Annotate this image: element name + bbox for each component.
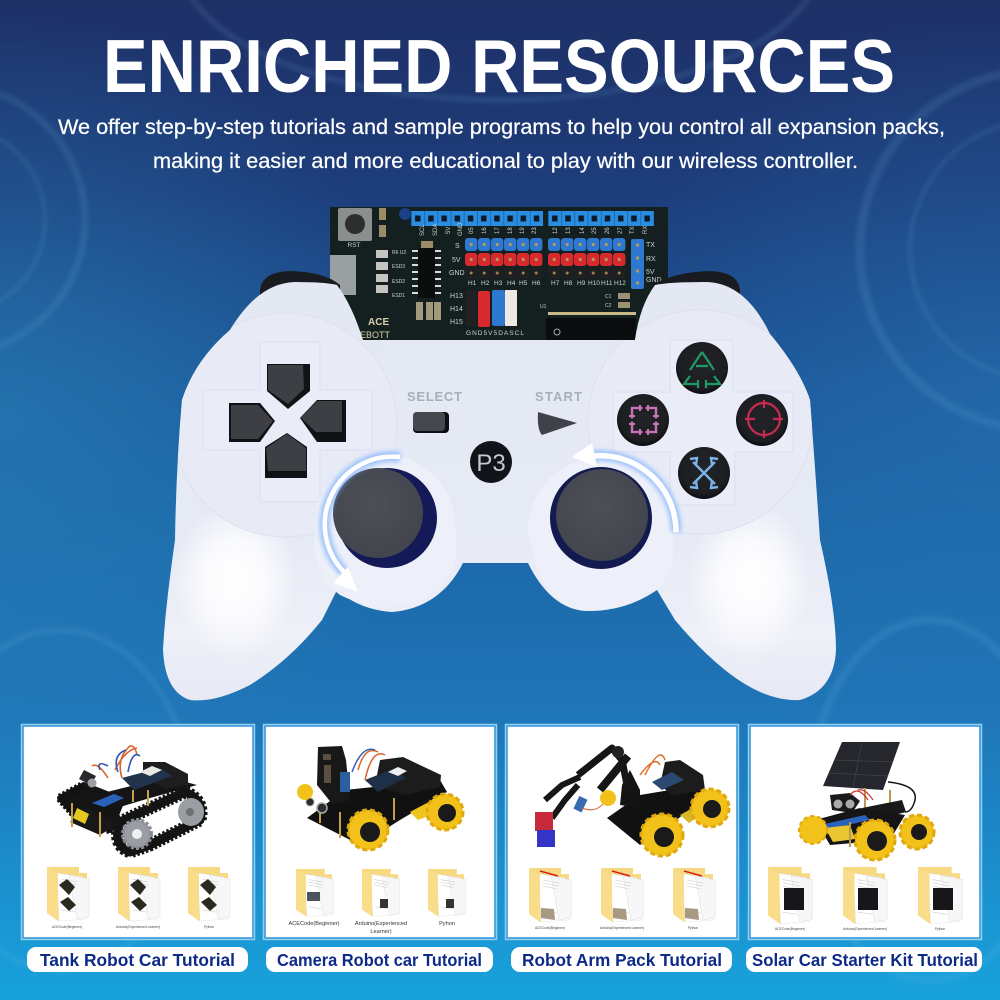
row labels: H5 [519, 280, 528, 287]
left joystick [314, 455, 457, 606]
triangle button [676, 342, 728, 394]
solar folder labels: ACECode(Beginner) [775, 927, 805, 931]
pin labels: 13 [566, 227, 572, 234]
row labels: H13 [450, 293, 463, 300]
pin labels: TX [630, 226, 636, 234]
chip and components: ESD2 [392, 279, 405, 285]
subtitle text [58, 115, 945, 173]
solar robot [799, 742, 934, 860]
select and start: START [535, 389, 582, 404]
pin labels: 05 [469, 227, 475, 234]
circle button [736, 394, 788, 446]
solar folder labels [775, 927, 945, 931]
tank folder labels: Arduino(Experienced Learner) [116, 925, 160, 929]
pin labels: 17 [495, 227, 501, 234]
arm folder labels: ACECode(Beginner) [535, 926, 565, 930]
row labels: H4 [507, 280, 516, 287]
grip highlights [189, 519, 796, 634]
shoulder buttons [260, 271, 740, 300]
top blue headers [411, 211, 654, 226]
H13-15 pin block: GND5V5DASCL [466, 330, 524, 337]
P3 button: P3 [476, 450, 506, 477]
left rotation arrow [325, 457, 400, 592]
row labels: H3 [494, 280, 503, 287]
row labels: GND [646, 277, 662, 284]
square button [617, 394, 669, 446]
camera folder labels: Learner) [370, 929, 392, 935]
row labels: TX [646, 242, 655, 249]
board logo: EBOTT [360, 330, 391, 340]
solar folders [768, 867, 962, 924]
label: camera robot car tutorial: Camera Robot car Tutorial [277, 950, 482, 970]
camera folder labels [288, 921, 455, 935]
camera folder labels: Pyhon [439, 921, 455, 927]
camera robot [297, 746, 463, 850]
pin labels: 14 [580, 227, 586, 234]
chip and components: C2 [605, 303, 612, 309]
panel: robot arm pack [506, 724, 738, 940]
controller body [163, 282, 836, 700]
pin labels: RX [643, 226, 649, 234]
d-pad buttons [229, 364, 346, 478]
right rotation arrow [572, 443, 676, 532]
arm folder labels: Arduino(Experienced Learner) [600, 926, 644, 930]
row labels: H9 [577, 280, 586, 287]
tank folder labels [52, 925, 214, 929]
chip and components [376, 208, 630, 320]
row labels: H7 [551, 280, 560, 287]
camera folder labels: ACECode(Beginner) [288, 921, 340, 927]
tank folders [47, 867, 230, 921]
select and start: SELECT [407, 389, 462, 404]
reset button [338, 208, 372, 249]
chip and components: ESD3 [392, 264, 405, 270]
title: ENRICHED RESOURCES [103, 24, 895, 108]
ESP module [540, 304, 636, 341]
right joystick [528, 458, 673, 610]
pin labels [420, 222, 649, 236]
camera folder labels: Arduino(Experienced [355, 921, 407, 927]
row labels: H11 [601, 280, 613, 287]
cross button [678, 447, 730, 499]
chip and components: R6 U2 [392, 250, 406, 256]
pin labels: 18 [508, 227, 514, 234]
row labels: H14 [450, 306, 463, 313]
board logo: ACE [368, 317, 389, 328]
chip and components: ESD1 [392, 293, 405, 299]
pin labels: 5V [446, 227, 452, 234]
pin labels: 23 [532, 227, 538, 234]
camera folders [296, 869, 466, 917]
select and start [407, 389, 582, 435]
pin labels: 27 [618, 227, 624, 234]
pin labels: SDA [433, 224, 439, 236]
row labels: H1 [468, 280, 477, 287]
row labels: H8 [564, 280, 573, 287]
board logo [360, 317, 391, 340]
pin labels: 12 [553, 227, 559, 234]
H13-15 pin block [465, 290, 524, 337]
row labels: H15 [450, 319, 463, 326]
right lobe and face button recess [588, 310, 812, 534]
label: tank robot car tutorial: Tank Robot Car Tutorial [40, 950, 235, 970]
pin rows [465, 238, 626, 279]
panel: camera robot car [264, 724, 496, 940]
label: robot arm pack tutorial: Robot Arm Pack Tutorial [522, 950, 722, 970]
P3 button [470, 441, 512, 483]
USB port [330, 255, 356, 295]
subtitle text: We offer step-by-step tutorials and sample programs to help you control all expansion packs, [58, 115, 945, 139]
solar folder labels: Arduino(Experienced Learner) [843, 927, 887, 931]
robot arm car [535, 746, 729, 856]
left lobe and d-pad recess [173, 313, 397, 537]
panel: solar car starter kit [748, 724, 982, 940]
arm folders [529, 868, 715, 922]
chip and components: C1 [605, 294, 612, 300]
row labels: 5V [452, 257, 461, 264]
row labels: H6 [532, 280, 541, 287]
tank folder labels: ACECode(Beginner) [52, 925, 82, 929]
pin labels: GND [458, 222, 464, 236]
pin labels: 19 [520, 227, 526, 234]
tank folder labels: Python [204, 925, 214, 929]
pin labels: SCL [420, 224, 426, 236]
row labels: H2 [481, 280, 490, 287]
expansion board [330, 207, 668, 341]
row labels: 5V [646, 269, 655, 276]
row labels: H10 [588, 280, 600, 287]
reset button: RST [348, 242, 361, 249]
solar folder labels: Python [935, 927, 945, 931]
right vertical blue pins [631, 239, 644, 289]
subtitle text: making it easier and more educational to play with our wireless controller. [153, 149, 858, 173]
pin labels: 26 [605, 227, 611, 234]
row labels [449, 242, 662, 326]
pin labels: 25 [592, 227, 598, 234]
row labels: H12 [614, 280, 626, 287]
label: solar car starter kit tutorial: Solar Car Starter Kit Tutorial [752, 950, 978, 970]
ESP module: U1 [540, 304, 547, 310]
row labels: GND [449, 270, 465, 277]
tank robot [60, 746, 204, 852]
arm folder labels [535, 926, 698, 930]
panel: tank robot car [22, 724, 254, 940]
row labels: RX [646, 256, 656, 263]
row labels: S [455, 243, 460, 250]
pin labels: 16 [482, 227, 488, 234]
arm folder labels: Python [688, 926, 698, 930]
